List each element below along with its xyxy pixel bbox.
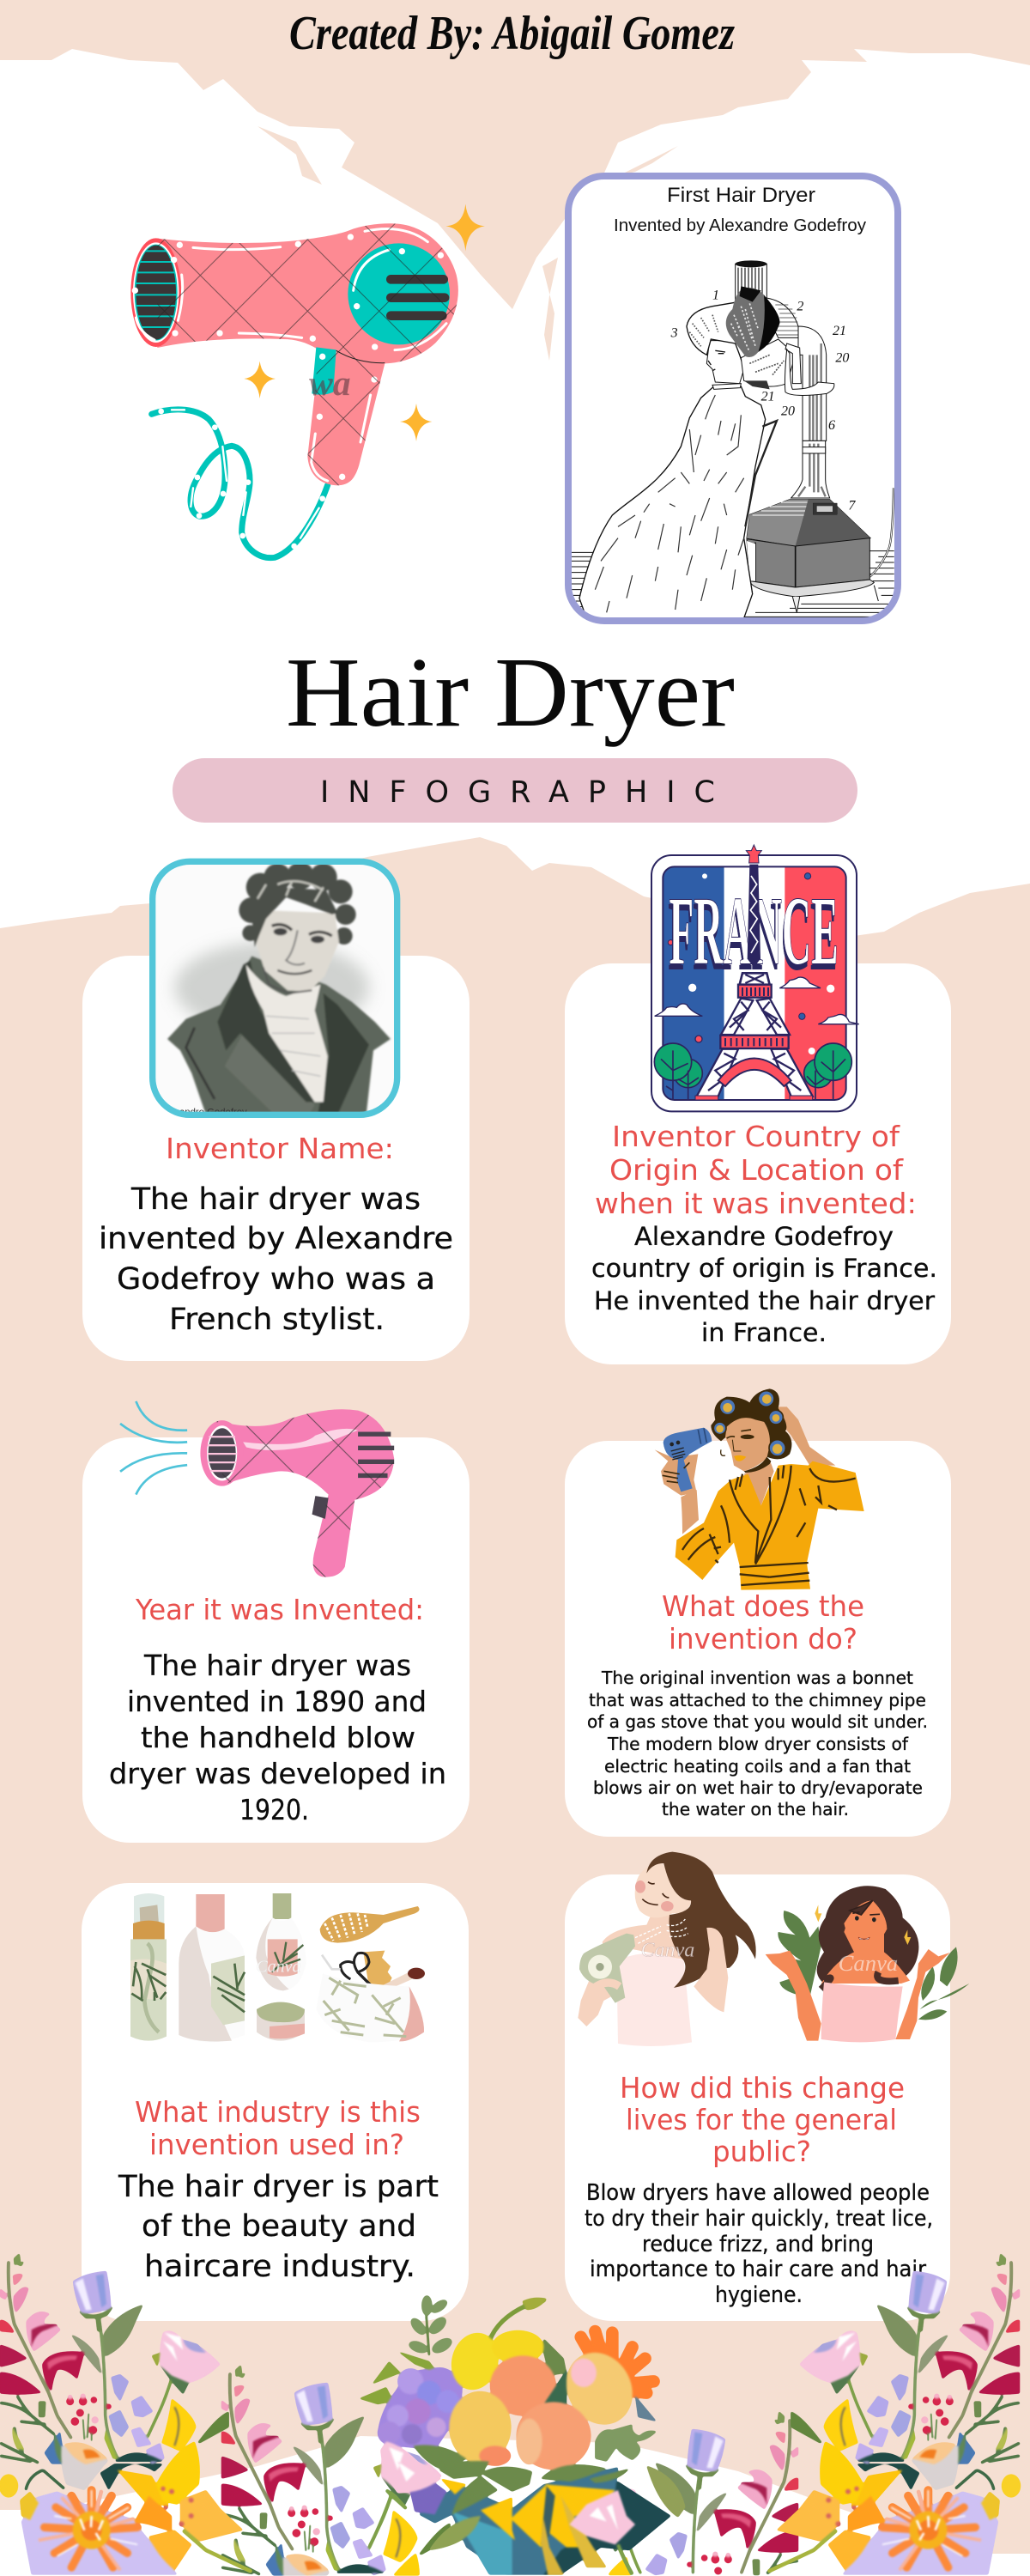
engraving: woman under dryer hood: 1	[712, 288, 719, 302]
body text: what the invention does: The modern blow dryer consists of	[607, 1734, 909, 1754]
heading: country of origin	[595, 1120, 917, 1220]
illustration: central fruit bouquet	[359, 2295, 685, 2574]
heading: industry: invention used in?	[149, 2128, 404, 2161]
body text: inventor name	[99, 1182, 453, 1337]
engraving: woman under dryer hood: 3	[670, 326, 678, 341]
body text: year invented: The hair dryer was	[143, 1649, 411, 1682]
credit line: Created By: Abigail Gomez	[289, 7, 735, 60]
top peach brush band	[0, 0, 1030, 309]
heater box	[747, 500, 870, 546]
body text: inventor name: French stylist.	[169, 1303, 385, 1337]
heading: inventor name: Inventor Name:	[166, 1132, 394, 1165]
engraving: woman under dryer hood: 6	[828, 418, 835, 433]
title: Hair Dryer	[286, 638, 735, 748]
body text: what the invention does: electric heating coils and a fan that	[604, 1756, 911, 1777]
heading: impact on the public: How did this change	[620, 2071, 905, 2105]
heading: industry	[135, 2095, 421, 2161]
illustration: woman drying hair and woman with styled hair	[578, 1852, 969, 2046]
body text: industry: haircare industry.	[144, 2250, 415, 2284]
body text: year invented: invented in 1890 and	[127, 1685, 427, 1718]
portrait: Alexandre Godefroy: xandre Godefroy	[174, 1107, 247, 1117]
heading: impact on the public: public?	[712, 2135, 811, 2168]
panel: year invented	[82, 1401, 470, 1843]
body text: year invented: 1920.	[239, 1793, 309, 1826]
body text: inventor name: Godefroy who was a	[117, 1262, 435, 1297]
engraving: woman under dryer hood: 20	[781, 404, 795, 418]
panel: impact on the public	[565, 1852, 969, 2321]
body text: country of origin: in France.	[701, 1318, 827, 1347]
body text: year invented: the handheld blow	[141, 1721, 415, 1754]
body text: impact on the public: hygiene.	[715, 2282, 803, 2308]
illustration: woman drying hair and woman with styled hair: Canva	[641, 1939, 694, 1961]
body text: impact on the public: to dry their hair quickly, treat lice,	[585, 2206, 933, 2232]
engraving: woman under dryer hood: 21	[761, 390, 775, 404]
heading: industry: What industry is this	[135, 2095, 421, 2129]
face and hair	[706, 341, 744, 384]
heading: country of origin: when it was invented:	[595, 1187, 917, 1220]
body text: impact on the public: importance to hair care and hair	[590, 2257, 926, 2282]
body text: what the invention does	[587, 1668, 928, 1820]
body text: impact on the public: Blow dryers have allowed people	[586, 2180, 930, 2206]
heading: what the invention does	[662, 1589, 864, 1656]
engraving: woman under dryer hood: 21	[833, 324, 846, 338]
body text: year invented	[109, 1649, 446, 1826]
chimney	[736, 264, 766, 301]
heading: what the invention does: What does the	[662, 1589, 864, 1623]
heading: year invented: Year it was Invented:	[135, 1593, 424, 1626]
panel: first hair dryer patent drawing	[568, 176, 898, 621]
floral border: back left sprig	[221, 2365, 451, 2575]
body text: what the invention does: that was attached to the chimney pipe	[589, 1690, 926, 1710]
portrait: Alexandre Godefroy	[153, 861, 397, 1117]
caption: first hair dryer: First Hair Dryer	[667, 184, 815, 207]
caption: inventor: Invented by Alexandre Godefroy	[614, 216, 866, 235]
floral border: back right sprig	[578, 2411, 798, 2575]
heading: country of origin: Origin & Location of	[609, 1153, 904, 1187]
heading: impact on the public: lives for the general	[626, 2103, 897, 2136]
body text: impact on the public	[585, 2180, 933, 2308]
engraving: woman under dryer hood: 2	[797, 300, 803, 314]
engraving: woman under dryer hood	[571, 260, 894, 618]
illustration: haircare products	[130, 1893, 425, 2042]
subtitle pill: INFOGRAPHIC	[320, 775, 715, 810]
body text: impact on the public: reduce frizz, and bring	[642, 2232, 874, 2257]
panel: industry	[82, 1883, 469, 2321]
floral border: left bouquet	[0, 2253, 251, 2574]
body text: what the invention does: the water on the hair.	[662, 1799, 849, 1820]
heading: impact on the public	[620, 2071, 905, 2168]
middle peach background	[0, 837, 1030, 2554]
icon: France badge with Eiffel Tower	[651, 845, 859, 1111]
panel: inventor name	[82, 861, 470, 1361]
dress	[579, 386, 766, 618]
body text: year invented: dryer was developed in	[109, 1757, 446, 1790]
illustration: woman in curlers using dryer	[655, 1388, 864, 1590]
body text: what the invention does: of a gas stove that you would sit under.	[587, 1711, 928, 1732]
panel: what the invention does	[565, 1388, 951, 1837]
body text: industry: The hair dryer is part	[118, 2170, 439, 2204]
illustration: woman drying hair and woman with styled hair: Canva	[839, 1950, 898, 1976]
body text: what the invention does: The original invention was a bonnet	[601, 1668, 913, 1688]
illustration: haircare products: Canva	[256, 1958, 301, 1977]
body text: country of origin	[591, 1222, 937, 1347]
band streaks	[258, 126, 678, 361]
body text: country of origin: country of origin is France.	[591, 1254, 937, 1283]
heading: country of origin: Inventor Country of	[612, 1120, 900, 1153]
body text: country of origin: Alexandre Godefroy	[634, 1222, 894, 1251]
illustration: pink and teal hair dryer with cord	[130, 204, 485, 558]
icon: pink blow dryer with air lines	[120, 1401, 394, 1577]
body text: what the invention does: blows air on wet hair to dry/evaporate	[593, 1777, 923, 1798]
panel: country of origin	[565, 845, 951, 1364]
heading: what the invention does: invention do?	[669, 1622, 857, 1656]
illustration: pink and teal hair dryer with cord: wa	[309, 364, 351, 404]
icon: gold sparkles	[244, 204, 485, 441]
body text: inventor name: invented by Alexandre	[99, 1222, 453, 1256]
floral border: right bouquet	[768, 2253, 1021, 2574]
body text: inventor name: The hair dryer was	[130, 1182, 421, 1217]
body text: country of origin: He invented the hair dryer	[594, 1286, 935, 1315]
body text: industry	[118, 2170, 439, 2284]
engraving: woman under dryer hood: 20	[835, 351, 849, 366]
body text: industry: of the beauty and	[142, 2209, 416, 2244]
subtitle pill	[173, 758, 857, 823]
engraving: woman under dryer hood: 7	[848, 498, 856, 513]
